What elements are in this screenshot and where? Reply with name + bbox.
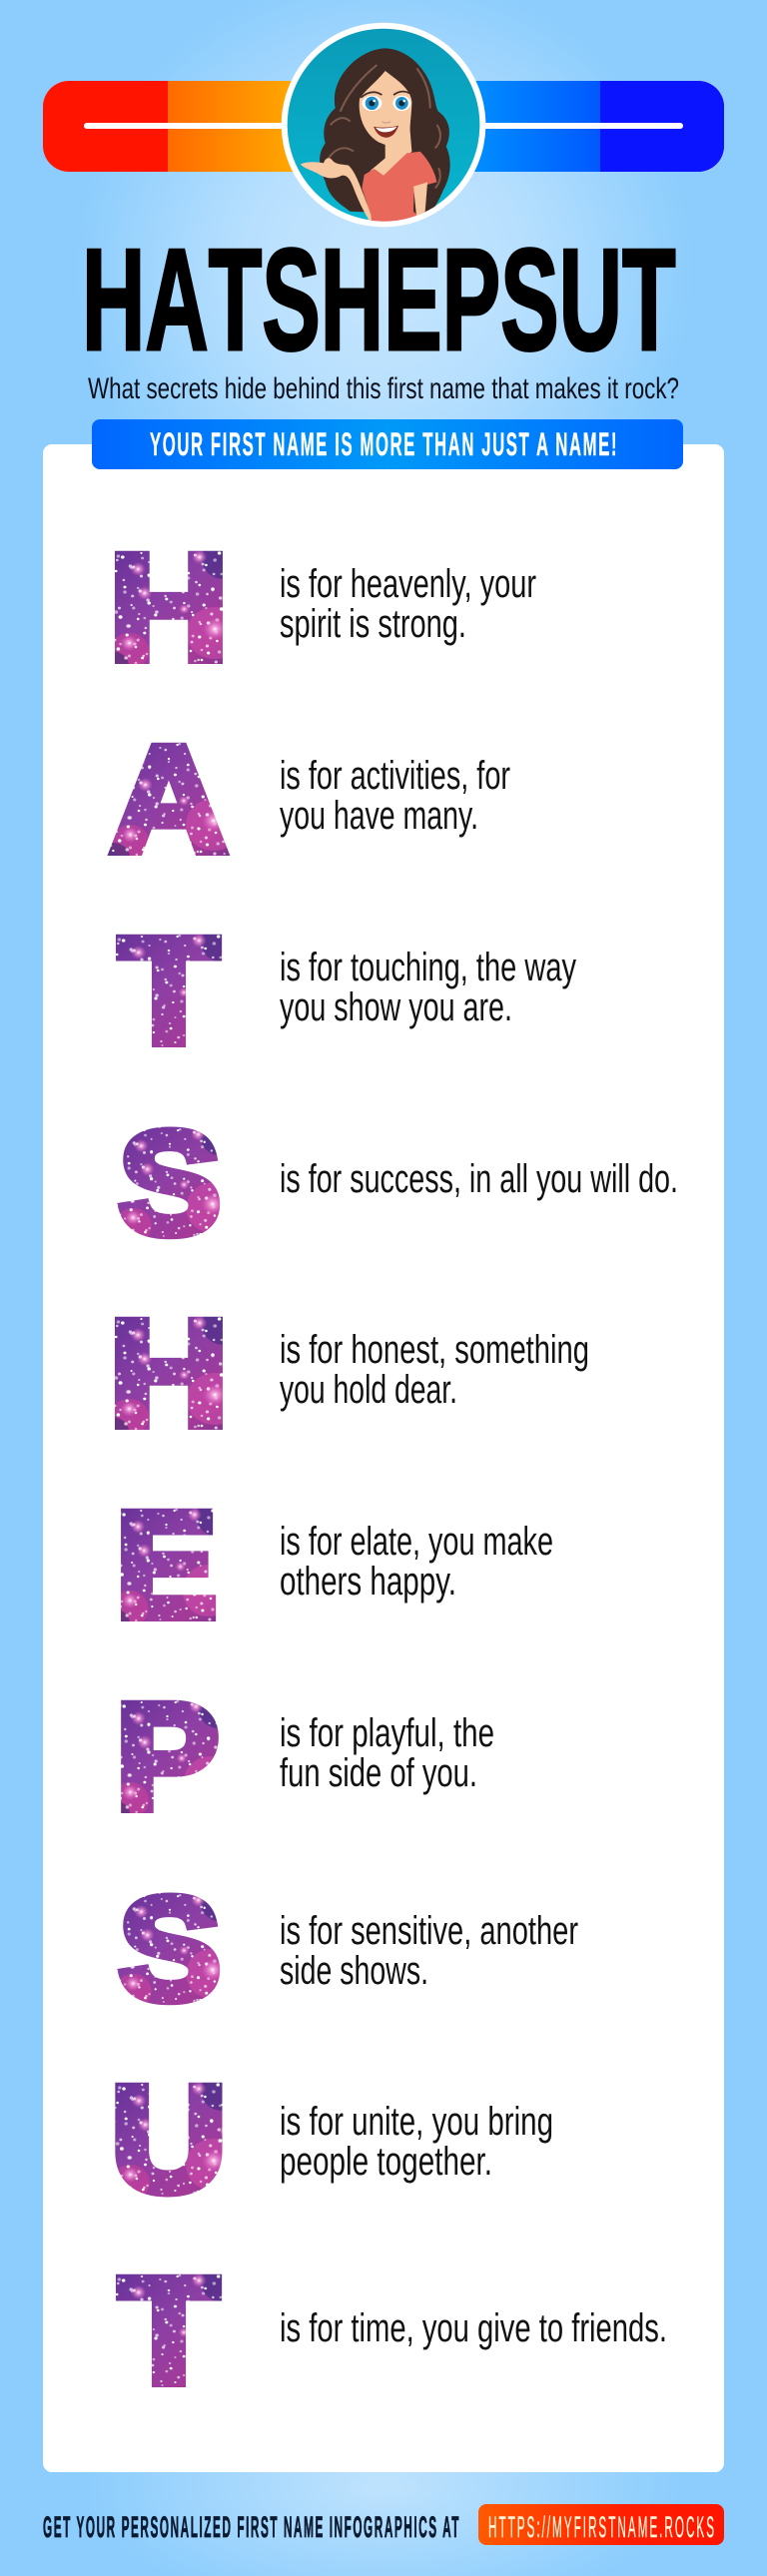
text: you hold dear. xyxy=(280,1368,457,1412)
text: others happy. xyxy=(280,1560,456,1604)
row: T touching xyxy=(120,908,576,1075)
text xyxy=(280,1711,494,1795)
white content panel xyxy=(43,444,724,2472)
letter U: U xyxy=(111,2055,227,2223)
letter P: P xyxy=(116,1673,219,1841)
row: S success xyxy=(119,1101,678,1264)
text xyxy=(280,1328,589,1412)
text: people together. xyxy=(280,2140,492,2184)
text: is for playful, the xyxy=(280,1711,494,1755)
letter H: H xyxy=(109,524,229,691)
letter T: T xyxy=(120,2248,218,2415)
letter E: E xyxy=(116,1482,217,1648)
text: you have many. xyxy=(280,794,478,838)
row: U unite xyxy=(111,2055,553,2223)
text xyxy=(280,2100,553,2184)
letter H: H xyxy=(109,1290,229,1457)
row: H heavenly xyxy=(109,524,536,691)
text: spirit is strong. xyxy=(280,602,466,646)
avatar portrait xyxy=(282,23,485,227)
footer url button xyxy=(478,2504,724,2545)
row: S sensitive xyxy=(119,1867,578,2030)
row: A activities xyxy=(111,715,510,883)
banner xyxy=(92,419,683,469)
text: fun side of you. xyxy=(280,1751,477,1795)
letter S: S xyxy=(119,1101,221,1264)
text: is for unite, you bring xyxy=(280,2100,553,2144)
letter S: S xyxy=(119,1867,221,2030)
text: is for activities, for xyxy=(280,754,510,798)
title: HATSHEPSUT xyxy=(82,221,676,380)
text xyxy=(280,1909,578,1993)
row: E elate xyxy=(116,1482,553,1648)
row: H honest xyxy=(109,1290,589,1457)
text: is for touching, the way xyxy=(280,946,576,989)
row: T time xyxy=(120,2248,667,2415)
text: is for honest, something xyxy=(280,1328,589,1372)
text: side shows. xyxy=(280,1949,428,1993)
text: is for elate, you make xyxy=(280,1520,553,1564)
text xyxy=(280,1520,553,1604)
letter T: T xyxy=(120,908,218,1075)
row: P playful xyxy=(116,1673,494,1841)
text: is for heavenly, your xyxy=(280,562,536,606)
text xyxy=(280,946,576,1029)
text: you show you are. xyxy=(280,985,512,1029)
letter A: A xyxy=(111,715,227,883)
header bar xyxy=(43,81,724,172)
text xyxy=(280,754,510,838)
text: is for sensitive, another xyxy=(280,1909,578,1953)
text xyxy=(280,562,536,646)
